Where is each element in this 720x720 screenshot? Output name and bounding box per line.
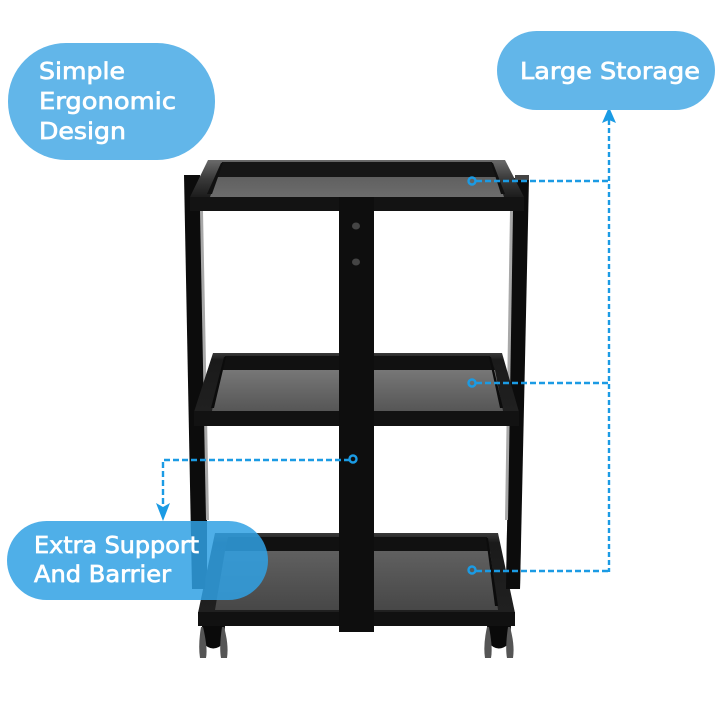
middle shelf tray	[212, 370, 503, 411]
bottom marker	[468, 566, 476, 574]
arrow up	[602, 107, 616, 123]
callout: large storage	[497, 31, 715, 110]
right caster wheel	[487, 626, 511, 648]
middle shelf rim	[194, 353, 519, 412]
top dashed leader	[476, 180, 609, 182]
callout text: Ergonomic	[39, 89, 176, 115]
bottom dashed leader	[476, 570, 609, 572]
top shelf tray	[210, 177, 504, 197]
top shelf back wall	[217, 162, 497, 177]
callout: simple ergonomic design	[8, 43, 215, 160]
top shelf groove left	[207, 163, 223, 194]
marker	[350, 456, 356, 462]
right rear post upper	[506, 178, 529, 589]
callout text: Large Storage	[520, 59, 700, 85]
middle shelf groove left	[211, 357, 226, 408]
right caster	[484, 626, 514, 658]
bottom shelf groove right	[486, 538, 498, 606]
bottom shelf tray	[215, 551, 498, 610]
callout pill	[7, 521, 268, 600]
right caster fork left	[484, 627, 492, 658]
left caster wheel	[202, 626, 225, 648]
callout: extra support and barrier	[7, 521, 268, 600]
top marker	[468, 178, 476, 184]
callout text: And Barrier	[34, 562, 172, 588]
vertical dashed line	[608, 120, 610, 572]
dashed elbow line	[163, 460, 350, 506]
top shelf	[190, 160, 524, 211]
bolt lower	[352, 258, 360, 266]
right post cap	[515, 175, 529, 180]
middle dashed leader	[476, 382, 609, 384]
middle shelf	[194, 353, 519, 426]
left caster fork right	[220, 627, 228, 658]
middle marker	[468, 380, 476, 386]
left post highlight	[200, 211, 209, 520]
bolts	[352, 222, 360, 266]
left post lower in front of bottom shelf	[192, 530, 207, 589]
left caster	[199, 626, 228, 658]
top shelf rim	[190, 160, 524, 197]
callout text	[39, 59, 176, 145]
bolt upper	[352, 222, 360, 230]
cart	[184, 160, 529, 658]
right caster fork right	[506, 627, 514, 658]
leader lines: large storage	[468, 107, 616, 574]
middle shelf groove right	[489, 357, 503, 408]
left rear post	[184, 175, 207, 589]
callout text: Design	[39, 119, 126, 145]
callout text	[34, 533, 199, 588]
left caster fork left	[199, 627, 207, 658]
right post highlight	[505, 211, 513, 520]
callout pill	[8, 43, 215, 160]
bottom shelf rim	[198, 533, 515, 613]
right post lower in front of bottom shelf	[506, 530, 521, 589]
bottom shelf	[198, 533, 515, 626]
center post	[339, 197, 374, 632]
callout text: Extra Support	[34, 533, 199, 559]
middle shelf front bar	[194, 411, 519, 426]
middle shelf back wall	[221, 356, 495, 370]
callout text: Simple	[39, 59, 125, 85]
arrow down	[156, 503, 170, 521]
bottom shelf front bar	[198, 612, 515, 626]
top shelf front bar	[190, 197, 524, 211]
callout pill	[497, 31, 715, 110]
leader line: extra support	[156, 456, 356, 521]
top shelf groove right	[491, 163, 505, 194]
bottom shelf back wall	[225, 537, 490, 551]
